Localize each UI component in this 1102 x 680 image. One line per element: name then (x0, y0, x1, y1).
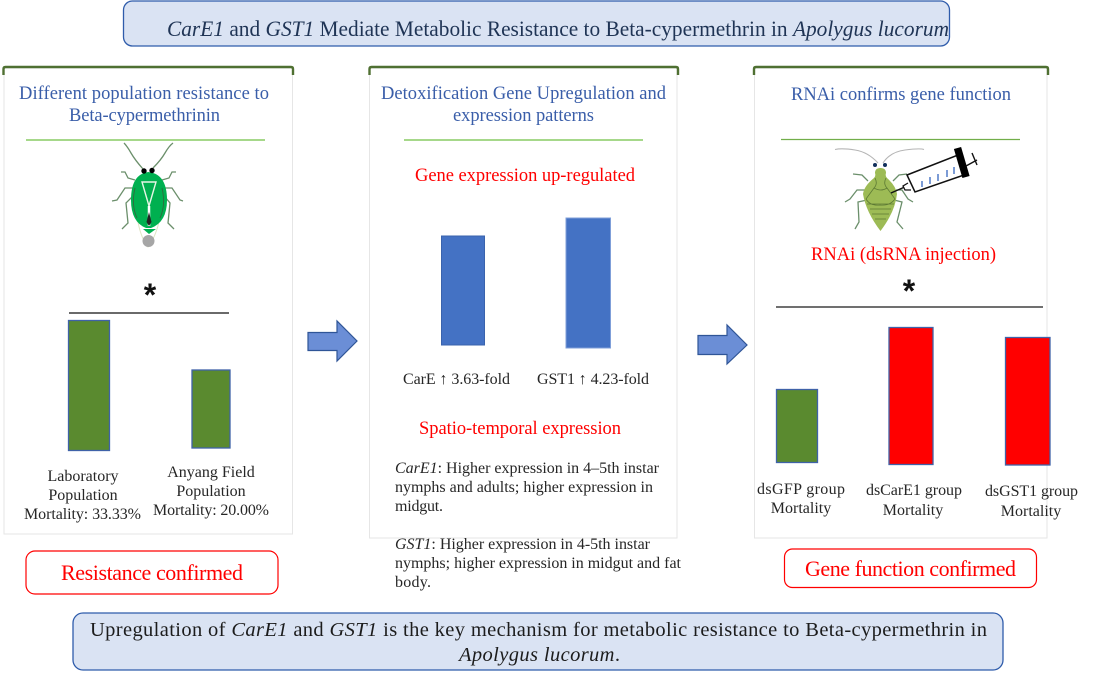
text block: CarE1: CarE1: Higher expression in 4–5th instar (395, 460, 660, 477)
bar labels (757, 481, 1078, 520)
significance marker: * (144, 277, 157, 313)
icon: green mirid bug (112, 143, 183, 247)
title banner (124, 1, 950, 46)
subheading: spatio-temporal: Spatio-temporal expression (419, 419, 621, 439)
panel heading (19, 84, 269, 126)
bar labels: dsCarE1 group (866, 482, 962, 499)
icon: injected nymph with syringe (835, 148, 977, 231)
bar labels: Mortality (771, 500, 831, 517)
conclusion banner: Upregulation of CarE1 and GST1 is the key mechanism for metabolic resistance to Beta-cypermethrin in (90, 619, 987, 641)
text block: CarE1 (395, 460, 660, 515)
bar chart: population mortality (68, 320, 230, 450)
text block: GST1: body. (395, 574, 431, 591)
bar labels: CarE ↑ 3.63-fold (403, 371, 510, 388)
panel heading: Beta-cypermethrinin (69, 106, 220, 126)
title text: CarE1 and GST1 Mediate Metabolic Resistance to Beta-cypermethrin in Apolygus lucorum (167, 16, 949, 41)
bar chart: fold change (442, 218, 610, 348)
bar label: field: Population (176, 483, 246, 500)
arrow (308, 321, 357, 361)
callout: gene function confirmed (784, 549, 1036, 588)
panel heading: Different population resistance to (19, 84, 269, 104)
bar label: field: Mortality: 20.00% (153, 502, 269, 519)
callout: resistance confirmed: Resistance confirmed (61, 560, 243, 585)
text block: CarE1: midgut. (395, 498, 443, 515)
text block: GST1 (395, 536, 682, 591)
bar labels: dsGST1 group (985, 483, 1078, 500)
panel heading: RNAi confirms gene function (791, 85, 1011, 105)
callout: resistance confirmed (26, 551, 278, 594)
significance marker: * (903, 273, 916, 309)
bar label: field (153, 464, 269, 519)
panel: RNAi (754, 67, 1078, 538)
panel: population resistance (4, 67, 293, 534)
conclusion banner: Apolygus lucorum. (457, 644, 620, 666)
subheading: gene expression: Gene expression up-regulated (415, 166, 636, 186)
bar label: laboratory: Mortality: 33.33% (24, 506, 141, 523)
panel heading (381, 84, 667, 126)
subheading: RNAi injection: RNAi (dsRNA injection) (811, 245, 996, 265)
bar labels: Mortality (1001, 503, 1061, 520)
bar labels (403, 371, 649, 388)
panel heading: expression patterns (453, 106, 594, 126)
callout: gene function confirmed: Gene function confirmed (805, 556, 1016, 581)
arrow (698, 325, 747, 364)
bar label: laboratory (24, 468, 141, 523)
panel: gene upregulation (370, 67, 678, 538)
panel heading: Detoxification Gene Upregulation and (381, 84, 667, 104)
bar labels: dsGFP group (757, 481, 845, 498)
bar label: laboratory: Laboratory (47, 468, 119, 485)
conclusion banner (73, 613, 1003, 670)
bar labels: Mortality (883, 502, 943, 519)
text block: CarE1: nymphs and adults; higher expression in (395, 479, 653, 496)
bar labels: GST1 ↑ 4.23-fold (537, 371, 649, 388)
text block: GST1: GST1: Higher expression in 4-5th instar (395, 536, 651, 553)
text block: GST1: nymphs; higher expression in midgut and fat (395, 555, 682, 572)
bar label: laboratory: Population (48, 487, 118, 504)
bar chart: RNAi mortality (776, 328, 1050, 465)
bar label: field: Anyang Field (167, 464, 255, 481)
